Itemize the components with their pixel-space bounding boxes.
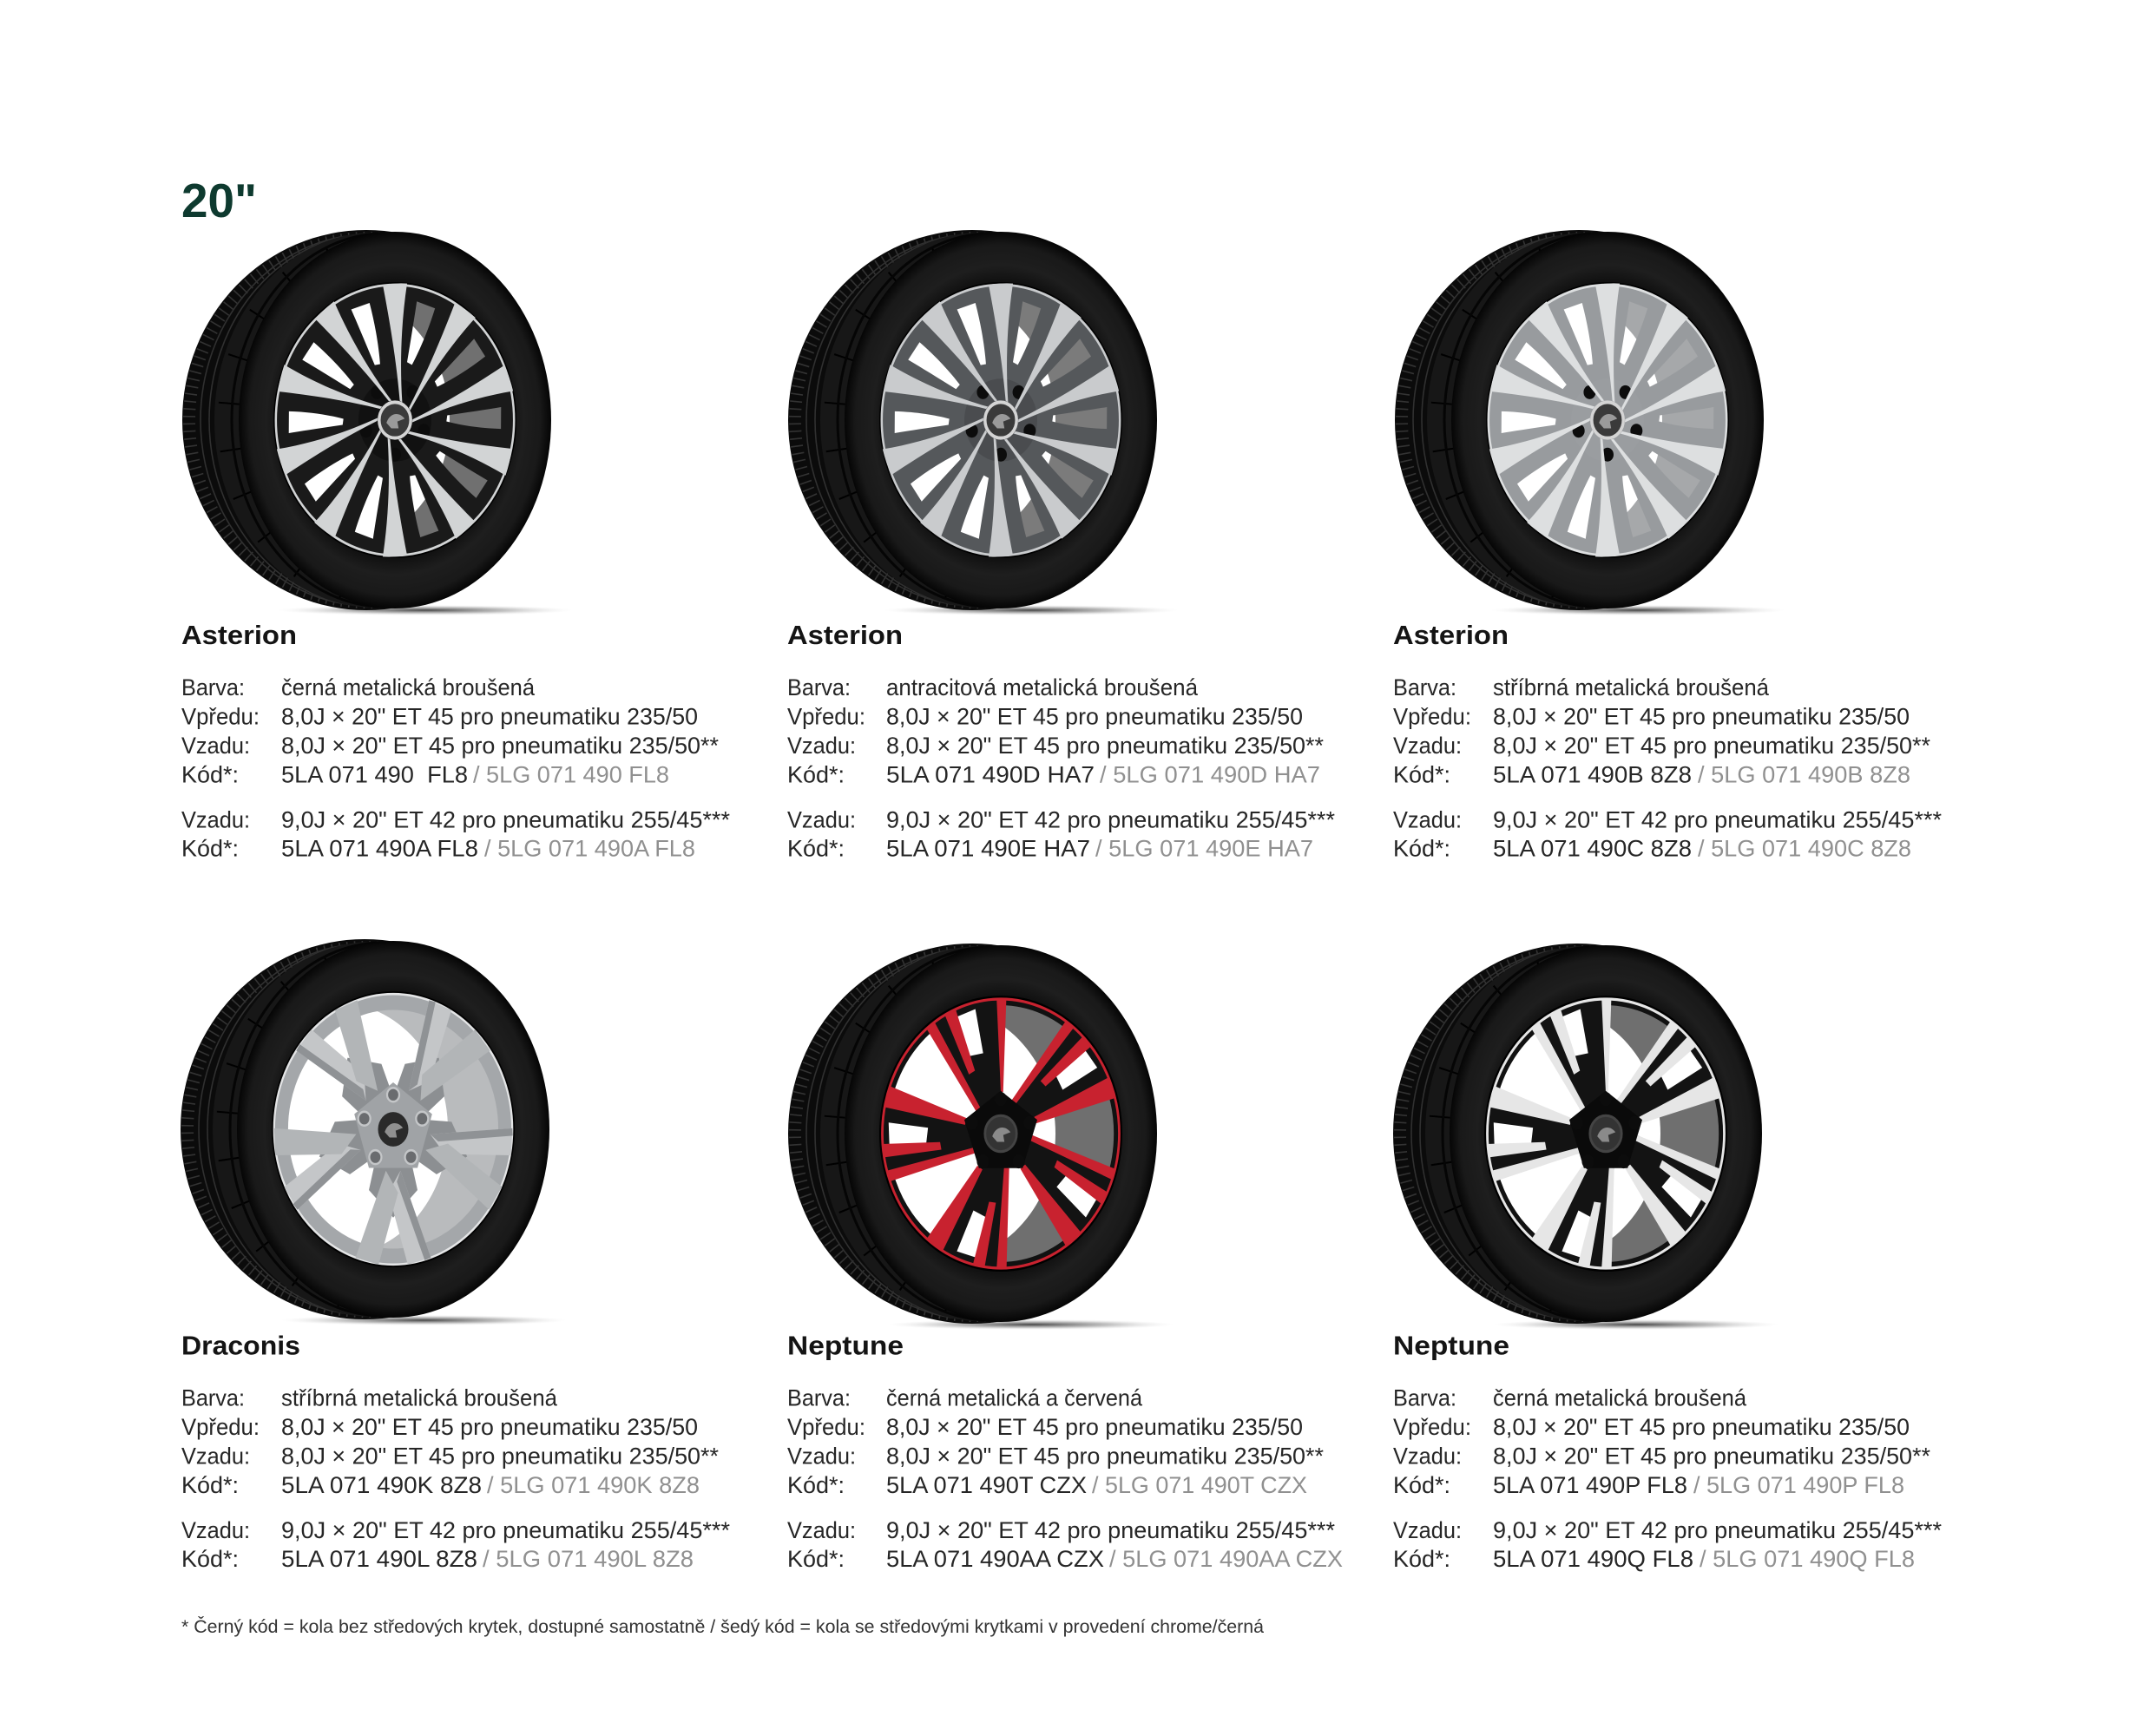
specification text: Vzadu: [787,806,856,832]
panel: Asterion black [181,230,730,861]
specification text: 5LA 071 490Q FL8 [1493,1546,1693,1572]
wheel: Neptune black polished [1393,944,1779,1330]
specification text: 5LA 071 490C 8Z8 [1493,835,1692,861]
specification text: Vzadu: [181,1517,250,1543]
specification text: 5LA 071 490D HA7 [886,761,1095,787]
specification text: 9,0J × 20" ET 42 pro pneumatiku 255/45*** [1493,1517,1942,1543]
specification text: Kód*: [1393,1472,1450,1498]
specification text: / 5LG 071 490A FL8 [484,835,695,861]
specification text: 8,0J × 20" ET 45 pro pneumatiku 235/50 [886,703,1303,729]
panel: Asterion anthracite [787,230,1335,861]
specification text: / 5LG 071 490B 8Z8 [1698,761,1910,787]
specification text: 5LA 071 490P FL8 [1493,1472,1687,1498]
specification text: Vpředu: [1393,1414,1471,1440]
specification text: Vpředu: [787,703,865,729]
specification text: 5LA 071 490E HA7 [886,835,1090,861]
specification text: Vzadu: [787,1443,856,1469]
specification text [787,1384,1343,1572]
wheel: Asterion anthracite ground [788,230,1179,615]
wheel: Neptune black and red [788,944,1174,1330]
specification text: 8,0J × 20" ET 45 pro pneumatiku 235/50** [1493,733,1930,759]
specification text: 9,0J × 20" ET 42 pro pneumatiku 255/45*** [281,806,730,832]
specification text: černá metalická broušená [281,674,536,700]
specification text: Kód*: [181,761,239,787]
specification text: / 5LG 071 490L 8Z8 [483,1546,694,1572]
specification text: Barva: [181,674,245,700]
specification text: Vpředu: [181,703,260,729]
heading: Draconis [181,1330,300,1361]
specification text: Kód*: [1393,835,1450,861]
specification text: Vzadu: [181,733,250,759]
specification text: Vzadu: [1393,1443,1462,1469]
specification text: 5LA 071 490K 8Z8 [281,1472,482,1498]
specification text: stříbrná metalická broušená [1493,674,1770,700]
heading: Neptune [1393,1330,1509,1361]
wheel: Asterion silver ground [1395,230,1785,615]
specification text: 8,0J × 20" ET 45 pro pneumatiku 235/50 [886,1414,1303,1440]
specification text: 8,0J × 20" ET 45 pro pneumatiku 235/50 [281,1414,698,1440]
specification text: 9,0J × 20" ET 42 pro pneumatiku 255/45*** [886,806,1335,832]
specification text: Vzadu: [787,733,856,759]
specification text: Barva: [787,674,851,700]
specification text: / 5LG 071 490AA CZX [1109,1546,1343,1572]
specification text: stříbrná metalická broušená [281,1384,558,1410]
heading: Asterion [181,620,297,650]
specification text: 8,0J × 20" ET 45 pro pneumatiku 235/50** [281,1443,719,1469]
wheel: Draconis [181,939,567,1325]
specification text: / 5LG 071 490K 8Z8 [487,1472,700,1498]
specification text: Kód*: [787,1546,845,1572]
specification text: Kód*: [787,835,845,861]
heading: Asterion [1393,620,1509,650]
specification text: černá metalická broušená [1493,1384,1747,1410]
specification text: Vzadu: [1393,806,1462,832]
panel: Draconis silver [181,939,730,1572]
specification text [1393,674,1942,861]
specification text: 5LA 071 490A FL8 [281,835,478,861]
specification text: / 5LG 071 490C 8Z8 [1698,835,1911,861]
specification text [181,1384,730,1572]
specification text: 9,0J × 20" ET 42 pro pneumatiku 255/45*** [281,1517,730,1543]
specification text: 5LA 071 490 FL8 [281,761,468,787]
heading: Asterion [787,620,903,650]
specification text: Kód*: [787,1472,845,1498]
panel: Neptune black [1393,944,1942,1572]
specification text: / 5LG 071 490 FL8 [473,761,669,787]
specification text: Kód*: [787,761,845,787]
specification text: Kód*: [181,835,239,861]
title: 20" [181,174,257,227]
specification text: 5LA 071 490T CZX [886,1472,1087,1498]
specification text: 5LA 071 490L 8Z8 [281,1546,477,1572]
specification text: 8,0J × 20" ET 45 pro pneumatiku 235/50 [281,703,698,729]
specification text: / 5LG 071 490Q FL8 [1700,1546,1915,1572]
specification text: Vzadu: [1393,733,1462,759]
heading: Neptune [787,1330,904,1361]
specification text: Kód*: [181,1472,239,1498]
specification text: 8,0J × 20" ET 45 pro pneumatiku 235/50** [886,1443,1324,1469]
specification text: / 5LG 071 490T CZX [1092,1472,1307,1498]
specification text: Vzadu: [1393,1517,1462,1543]
specification text: / 5LG 071 490D HA7 [1100,761,1320,787]
specification text: černá metalická a červená [886,1384,1143,1410]
wheel: Asterion black ground [182,230,573,615]
specification text: Vpředu: [787,1414,865,1440]
specification text: Vzadu: [787,1517,856,1543]
specification text: Kód*: [181,1546,239,1572]
specification text: Vzadu: [181,806,250,832]
specification text: Kód*: [1393,761,1450,787]
specification text: 5LA 071 490B 8Z8 [1493,761,1692,787]
specification text: 9,0J × 20" ET 42 pro pneumatiku 255/45*** [886,1517,1335,1543]
specification text: Vpředu: [181,1414,260,1440]
specification text: Kód*: [1393,1546,1450,1572]
specification text: / 5LG 071 490P FL8 [1693,1472,1904,1498]
specification text: 9,0J × 20" ET 42 pro pneumatiku 255/45*** [1493,806,1942,832]
specification text: Barva: [181,1384,245,1410]
specification text [1393,1384,1942,1572]
specification text: Barva: [1393,674,1456,700]
specification text: 8,0J × 20" ET 45 pro pneumatiku 235/50** [281,733,719,759]
specification text: Vpředu: [1393,703,1471,729]
specification text: Barva: [1393,1384,1456,1410]
specification text: antracitová metalická broušená [886,674,1199,700]
footnote: * Černý kód = kola bez středových krytek, dostupné samostatně / šedý kód = kola se středovými krytkami v provedení chrome/černá [181,1617,1264,1637]
specification text [787,674,1335,861]
panel: Neptune red [787,944,1343,1572]
specification text: Barva: [787,1384,851,1410]
specification text: Vzadu: [181,1443,250,1469]
specification text: / 5LG 071 490E HA7 [1095,835,1313,861]
specification text: 8,0J × 20" ET 45 pro pneumatiku 235/50 [1493,1414,1910,1440]
specification text [181,674,730,861]
specification text: 5LA 071 490AA CZX [886,1546,1104,1572]
specification text: 8,0J × 20" ET 45 pro pneumatiku 235/50** [1493,1443,1930,1469]
specification text: 8,0J × 20" ET 45 pro pneumatiku 235/50** [886,733,1324,759]
panel: Asterion silver [1393,230,1942,861]
specification text: 8,0J × 20" ET 45 pro pneumatiku 235/50 [1493,703,1910,729]
